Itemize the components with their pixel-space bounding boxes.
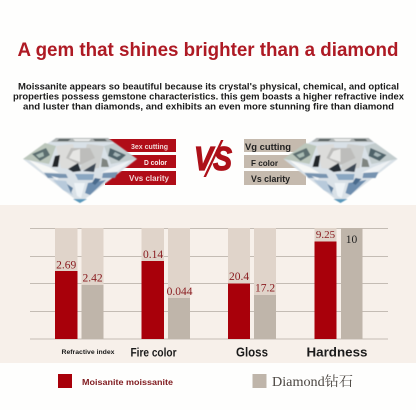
category labels — [62, 346, 368, 360]
bars: refractive index — [55, 228, 104, 339]
diamond: left — [23, 138, 137, 203]
bars: refractive index: 2.42 — [82, 272, 103, 284]
description text: Moissanite appears so beautiful because its crystal's physical, chemical, and optical — [18, 82, 399, 92]
grey spec bars: diamond — [244, 139, 306, 185]
description text: and luster than diamonds, and exhibits an even more stunning fire than diamond — [23, 102, 394, 112]
bars: hardness: 9.25 — [316, 229, 336, 241]
description text — [13, 82, 405, 112]
description text: properties possess gemstone characteristics. this gem boasts a higher refractive index — [13, 92, 405, 102]
bars: refractive index: 2.69 — [56, 260, 77, 272]
title: A gem that shines brighter than a diamond — [18, 39, 398, 61]
grey spec bars: diamond: Vs clarity — [251, 174, 290, 184]
legend: moissanite: Moisanite moissanite — [82, 377, 173, 387]
bars: fire color — [142, 228, 193, 339]
red spec bars: moissanite: Vvs clarity — [129, 174, 170, 183]
category labels: Gloss — [236, 346, 268, 360]
diamond: right — [284, 138, 398, 203]
bars: gloss — [228, 228, 276, 339]
category labels: Fire color — [130, 346, 177, 360]
red spec bars: moissanite — [105, 139, 176, 185]
red spec bars: moissanite: 3ex cutting — [131, 142, 168, 151]
bars: gloss: 17.2 — [255, 282, 275, 294]
bars: hardness — [314, 228, 362, 339]
bars: hardness: 10 — [346, 234, 358, 246]
VS mark: VS — [194, 140, 232, 177]
red spec bars: moissanite: D color — [144, 158, 167, 167]
legend: diamond: Diamond钻石 — [272, 374, 353, 389]
bars: fire color: 0.044 — [167, 286, 193, 298]
category labels: Hardness — [306, 346, 368, 360]
category labels: Refractive index — [62, 349, 115, 356]
legend: moissanite — [58, 374, 173, 388]
grey spec bars: diamond: Vg cutting — [245, 142, 291, 153]
bars: fire color: 0.14 — [143, 249, 163, 261]
bar chart — [30, 228, 388, 360]
grey spec bars: diamond: F color — [251, 158, 279, 168]
panel: bar chart background — [0, 205, 416, 363]
bars: gloss: 20.4 — [229, 271, 249, 283]
